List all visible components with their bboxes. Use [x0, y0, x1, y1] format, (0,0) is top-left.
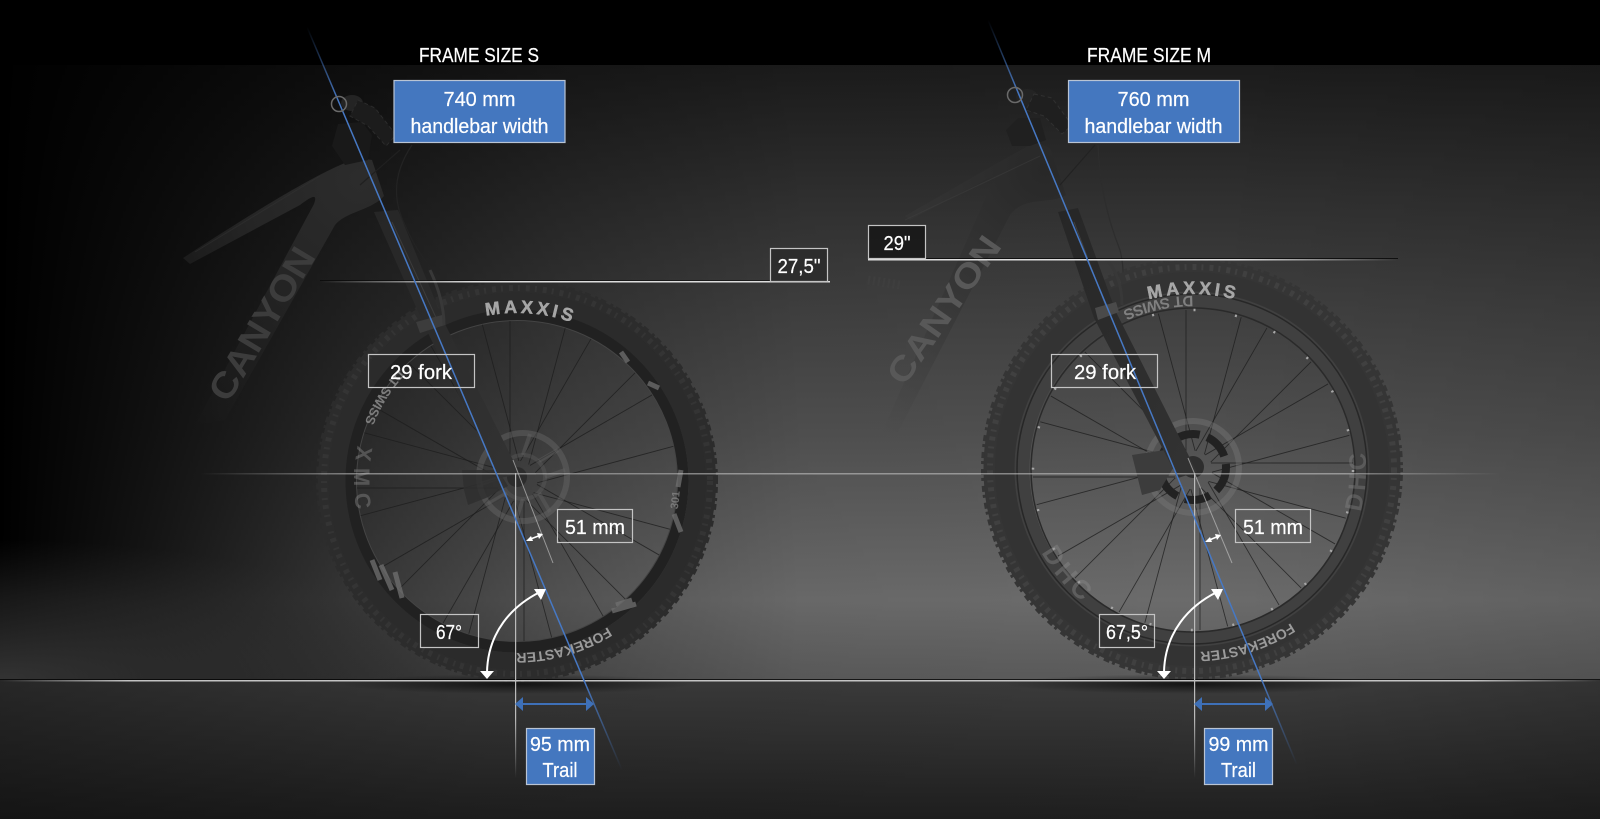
- tyre and rim lettering M: MAXXIS: [1147, 281, 1236, 300]
- callout: 95 mm trail: [526, 728, 594, 784]
- frame M: CANYON: [879, 229, 1009, 392]
- brake disc S: [462, 433, 567, 521]
- blue steering axis lines: [307, 20, 1297, 770]
- label: 67 degrees: [420, 614, 478, 648]
- callout: 99 mm trail: Trail: [1221, 760, 1256, 782]
- frame M: [868, 89, 1123, 437]
- tyre and rim lettering S: [354, 300, 680, 663]
- label: 29 inch wheel: [868, 226, 926, 258]
- callout: 740 mm handlebar width: 740 mm: [444, 89, 516, 111]
- tyre and rim lettering S: MAXXIS: [485, 300, 574, 321]
- heading: frame size S: FRAME SIZE S: [419, 45, 539, 67]
- label: 67 degrees: 67°: [436, 622, 462, 644]
- tyre and rim lettering M: DHC: [1345, 454, 1366, 510]
- callout: 95 mm trail: Trail: [542, 760, 578, 782]
- offset arrows 51 mm: [526, 533, 1221, 542]
- fork S: [374, 210, 520, 478]
- handlebar markers: [332, 88, 1022, 112]
- wheel M: [982, 260, 1402, 678]
- tyre and rim lettering M: [1042, 281, 1366, 662]
- label: 27,5 inch wheel: [770, 248, 828, 282]
- callout: 760 mm handlebar width: 760 mm: [1118, 89, 1190, 111]
- tyre and rim lettering M: DHC: [1042, 544, 1090, 599]
- label: 29 fork S: 29 fork: [390, 362, 453, 384]
- head angle arrow S: [480, 589, 546, 679]
- label: 51 mm S: [558, 510, 632, 542]
- tyre and rim lettering S: FOREKASTER: [516, 628, 612, 663]
- trail arrow S: [515, 697, 594, 711]
- tyre and rim lettering S: 301: [670, 492, 680, 509]
- callout: 99 mm trail: [1204, 728, 1272, 784]
- label: 29 fork M: 29 fork: [1074, 362, 1137, 384]
- label: 29 fork M: [1052, 354, 1158, 388]
- callout: 740 mm handlebar width: [394, 80, 565, 142]
- label: 51 mm M: 51 mm: [1243, 517, 1303, 539]
- offset lines S and M: [513, 458, 1232, 563]
- callout: 99 mm trail: 99 mm: [1208, 734, 1268, 756]
- ground shadows: [340, 674, 1375, 694]
- reference lines: [0, 258, 1600, 778]
- heading: frame size M: FRAME SIZE M: [1087, 45, 1211, 67]
- frame S: CANYON: [200, 240, 323, 408]
- tyre and rim lettering S: DT SWISS: [366, 370, 404, 424]
- bike: frame size S: [184, 95, 718, 682]
- tyre and rim lettering S: XMC: [354, 446, 372, 508]
- label: 67,5 degrees: [1100, 614, 1154, 648]
- label: 29 inch wheel: 29": [884, 233, 910, 255]
- callout: 760 mm handlebar width: handlebar width: [1084, 116, 1222, 138]
- brake disc M: [1132, 421, 1239, 513]
- callout: 760 mm handlebar width: [1068, 80, 1240, 142]
- callout: 95 mm trail: 95 mm: [530, 734, 590, 756]
- bike: frame size M: [879, 87, 1403, 679]
- trail arrow M: [1194, 697, 1273, 711]
- fork M: [1058, 208, 1197, 478]
- tyre and rim lettering M: FOREKASTER: [1200, 624, 1296, 662]
- wheel S: [318, 282, 716, 680]
- tyre and rim lettering M: DT SWISS: [1124, 296, 1192, 320]
- frame S: [183, 95, 440, 425]
- label: 29 fork S: [368, 354, 474, 388]
- head angle arrow M: [1157, 589, 1223, 679]
- label: 67,5 degrees: 67,5°: [1106, 622, 1148, 644]
- label: 51 mm S: 51 mm: [565, 517, 625, 539]
- rim decals S: [372, 352, 681, 611]
- callout: 740 mm handlebar width: handlebar width: [410, 116, 548, 138]
- label: 27,5 inch wheel: 27,5": [778, 256, 820, 278]
- label: 51 mm M: [1236, 510, 1310, 542]
